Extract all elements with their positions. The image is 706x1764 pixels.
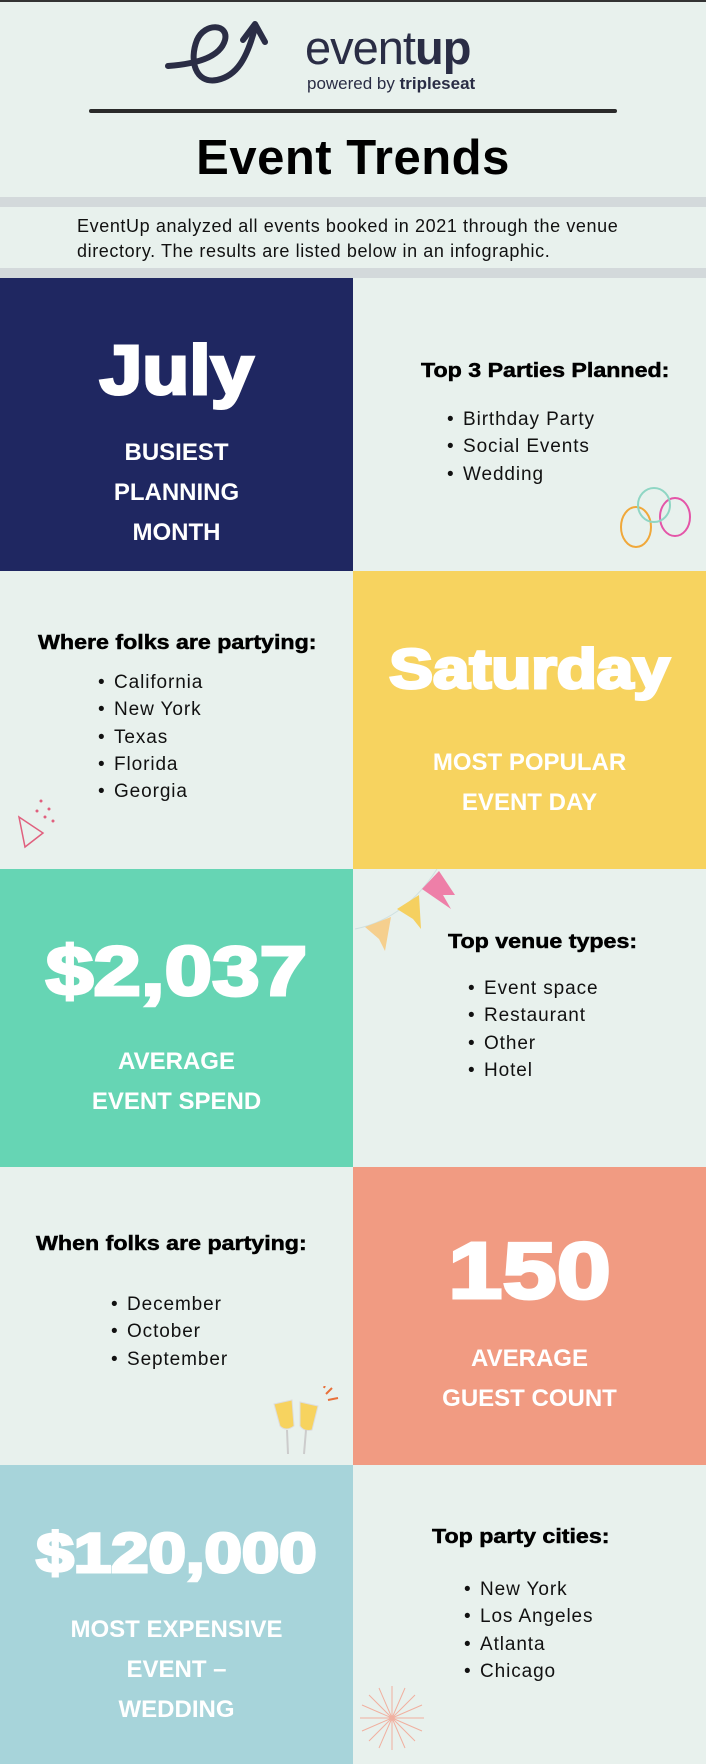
logo [165,21,475,93]
grey band [0,268,706,278]
list: September [127,1349,228,1370]
list: New York [480,1579,567,1600]
heading: Top 3 Parties Planned: [421,360,669,382]
caption: MOST EXPENSIVE [70,1616,283,1643]
caption: BUSIEST [124,439,228,466]
tagline: powered by tripleseat [307,74,475,93]
heading: Top party cities: [432,1526,609,1548]
icon: logo mark [165,21,268,84]
panel: where partying [18,632,316,848]
intro text [77,216,618,261]
top border [0,0,706,2]
caption [114,439,239,546]
caption: PLANNING [114,479,239,506]
list: Florida [114,754,178,775]
panel: saturday [353,571,706,869]
panel: top parties [420,360,691,548]
list: Georgia [114,781,188,802]
intro text: directory. The results are listed below in an infographic. [77,241,550,261]
caption: AVERAGE [471,1345,588,1372]
caption [70,1616,283,1723]
panel: venue types [355,869,637,1081]
caption: GUEST COUNT [442,1385,617,1412]
divider line [89,109,617,113]
list: October [127,1321,201,1342]
big text: $120,000 [36,1521,317,1584]
panel: when partying [36,1233,338,1454]
caption: MONTH [132,519,220,546]
intro text: EventUp analyzed all events booked in 2021 through the venue [77,216,618,236]
caption [433,749,626,816]
caption: EVENT SPEND [92,1088,261,1115]
list: Event space [484,978,598,999]
panel: busiest month [0,278,353,571]
icon: party popper [18,800,54,848]
heading: When folks are partying: [36,1233,307,1255]
list: Hotel [484,1060,533,1081]
panel: average spend [0,869,353,1167]
wordmark: eventup [305,21,470,74]
list [448,409,595,485]
caption: EVENT DAY [462,789,597,816]
list: Los Angeles [480,1606,593,1627]
big text: $2,037 [46,932,307,1010]
panel: guest count [353,1167,706,1465]
caption: AVERAGE [118,1048,235,1075]
icon: balloons [620,487,691,548]
list [112,1294,228,1370]
big text: July: July [99,331,254,409]
list: Restaurant [484,1005,586,1026]
list: Wedding [463,464,544,485]
list: Social Events [463,436,590,457]
icon: champagne [274,1386,338,1454]
list [98,672,203,802]
heading: Top venue types: [448,931,637,953]
icon: fireworks [360,1686,424,1750]
heading: Where folks are partying: [38,632,316,654]
title: Event Trends [196,131,510,185]
caption [92,1048,261,1115]
list: Texas [114,727,168,748]
grey band [0,197,706,207]
panel: top cities [360,1526,609,1750]
list [464,1579,593,1682]
list: Other [484,1033,536,1054]
list: California [114,672,203,693]
caption: EVENT – [126,1656,227,1683]
list: Chicago [480,1661,556,1682]
list [468,978,598,1081]
list: New York [114,699,201,720]
icon: bunting [355,869,455,951]
list: Birthday Party [463,409,595,430]
list: December [127,1294,222,1315]
big text: Saturday [389,637,670,700]
caption [442,1345,617,1412]
list: Atlanta [480,1634,545,1655]
big text: 150 [448,1226,611,1315]
caption: WEDDING [118,1696,234,1723]
caption: MOST POPULAR [433,749,626,776]
panel: most expensive [0,1465,353,1764]
